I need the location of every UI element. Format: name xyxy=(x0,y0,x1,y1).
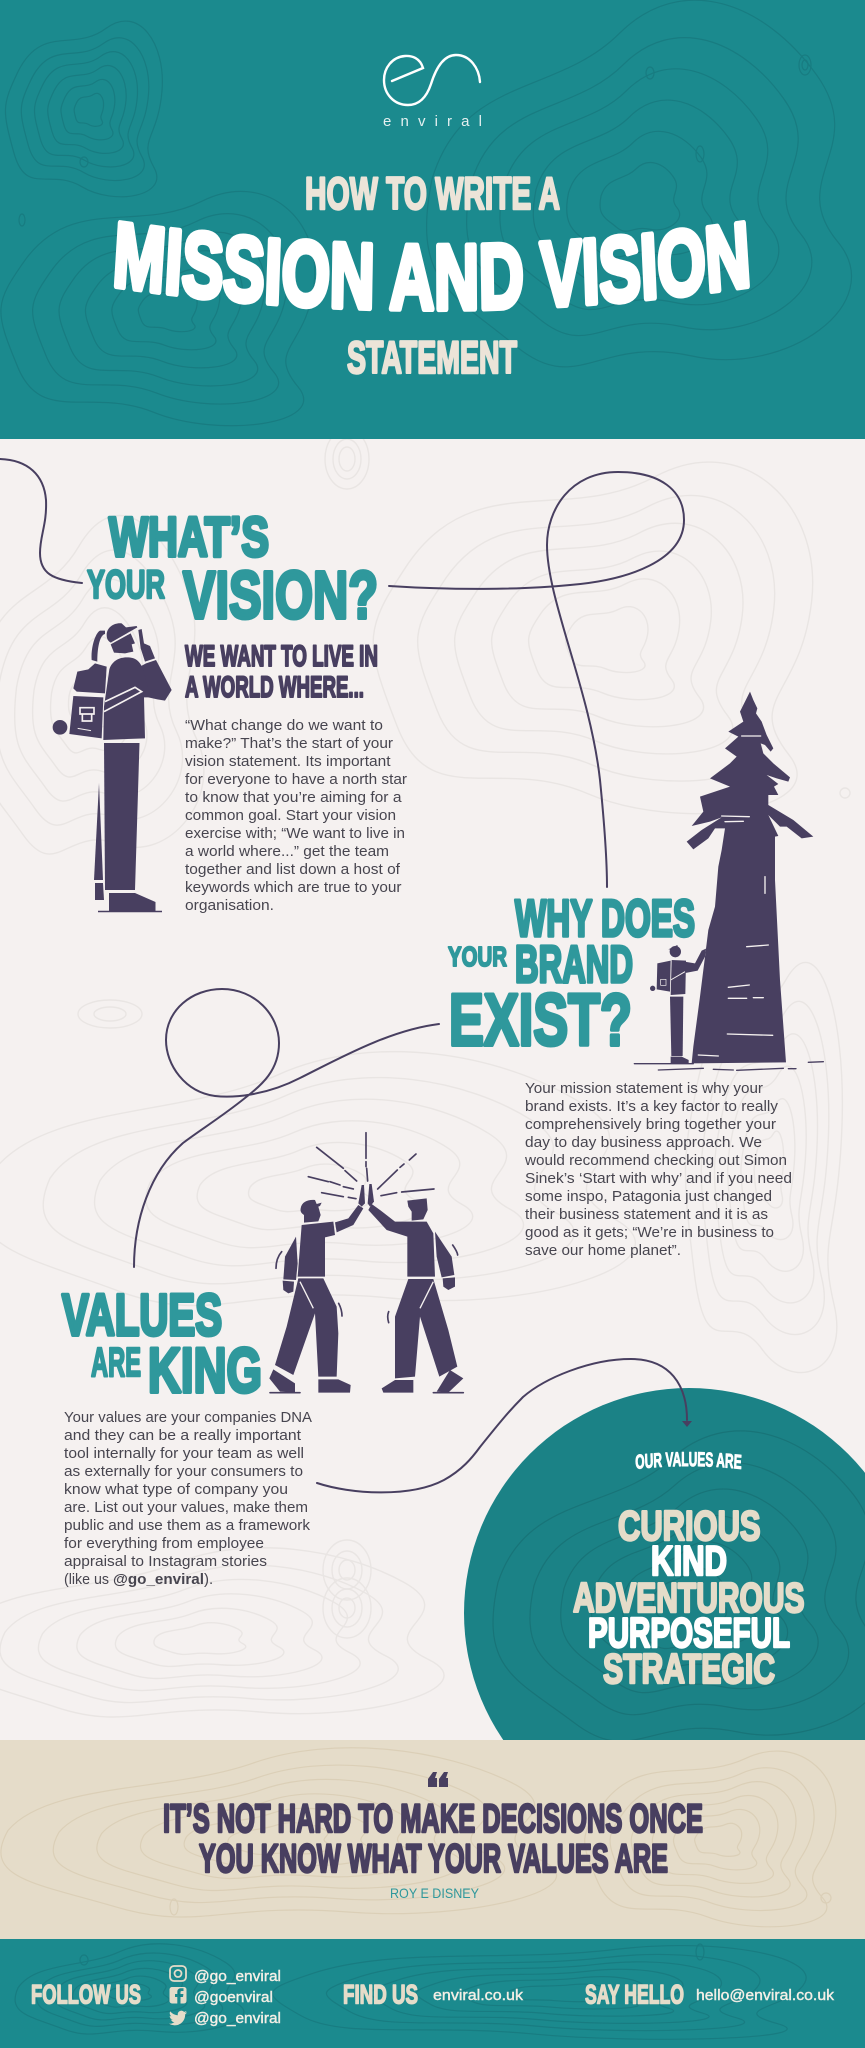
icon: facebook xyxy=(170,1987,186,2004)
heading: what's your vision xyxy=(87,505,378,633)
text block: mission body: comprehensively bring together your xyxy=(525,1116,776,1133)
subheading: we want to live in a world where: WE WANT TO LIVE IN xyxy=(185,640,378,673)
icon: instagram xyxy=(170,1966,186,1981)
footer: say hello xyxy=(585,1980,835,2010)
tree marks xyxy=(698,736,773,1056)
illustration: two people high-fiving xyxy=(269,1133,463,1393)
small hiker xyxy=(650,945,706,1063)
text block: mission body: brand exists. It’s a key factor to really xyxy=(525,1098,779,1115)
panel: values circle xyxy=(464,1388,865,1740)
text block: vision body: for everyone to have a north star xyxy=(185,771,407,788)
heading: why does your brand exist: BRAND xyxy=(515,936,633,994)
illustration: hiker with binoculars xyxy=(53,623,172,912)
text block: values body: as externally for your consumers to xyxy=(64,1463,303,1480)
value: kind: KIND xyxy=(651,1537,727,1584)
text block: mission body: save our home planet”. xyxy=(525,1242,681,1259)
footer: say hello: hello@enviral.co.uk xyxy=(696,1987,835,2004)
text block: values body: (like us xyxy=(64,1571,109,1588)
text block: vision body: keywords which are true to your xyxy=(185,879,402,896)
heading: what's your vision: YOUR xyxy=(87,563,165,607)
icon: quotation mark xyxy=(428,1772,448,1787)
title line 1: HOW TO WRITE A xyxy=(305,168,560,219)
impact lines xyxy=(270,1133,463,1393)
text block: mission body: their business statement and it is as xyxy=(525,1206,768,1223)
brand name: enviral xyxy=(383,113,482,130)
handle: instagram: @go_enviral xyxy=(194,1968,281,1985)
text block: values body: for everything from employee xyxy=(64,1535,264,1552)
text block: mission body: Sinek’s ‘Start with why’ and if you need xyxy=(525,1170,792,1187)
heading: why does your brand exist: EXIST? xyxy=(449,980,632,1061)
panel: header background xyxy=(0,0,865,439)
arrow: loop from brand to values heading xyxy=(134,989,439,1267)
arrow: curve into vision heading xyxy=(0,459,82,583)
panel: main background xyxy=(0,429,865,1740)
heading: values are king: KING xyxy=(148,1336,262,1406)
text block: values body: Your values are your companies DNA xyxy=(64,1409,312,1426)
panel: quote band xyxy=(0,1740,865,1939)
text block: values body: public and use them as a framework xyxy=(64,1517,311,1534)
heading: values are king: VALUES xyxy=(62,1283,222,1348)
right person xyxy=(368,1184,463,1393)
upper body xyxy=(53,623,172,740)
title line 3: STATEMENT xyxy=(347,332,517,383)
title xyxy=(114,168,750,383)
tree xyxy=(634,692,823,1070)
value: strategic: STRATEGIC xyxy=(603,1645,775,1692)
arrow: loop from vision to brand heading xyxy=(389,472,684,887)
text block: vision body: make?” That’s the start of your xyxy=(185,735,393,752)
quote attribution: ROY E DISNEY xyxy=(390,1885,480,1901)
left person xyxy=(269,1185,365,1393)
legs and boots xyxy=(104,743,140,890)
footer: follow us xyxy=(31,1966,281,2027)
text block: vision body: “What change do we want to xyxy=(185,717,383,734)
text block: mission body: good as it gets; “We’re in business to xyxy=(525,1224,774,1241)
values heading: OUR VALUES ARE xyxy=(635,1452,742,1470)
subheading: we want to live in a world where: A WORLD WHERE... xyxy=(185,671,364,704)
text block: vision body: exercise with; “We want to live in xyxy=(185,825,405,842)
footer: say hello: SAY HELLO xyxy=(585,1980,684,2010)
logo xyxy=(383,55,482,130)
heading: why does your brand exist: WHY DOES xyxy=(515,890,695,948)
text block: vision body xyxy=(185,717,407,914)
footer: find us xyxy=(343,1980,524,2010)
text block: values body: are. List out your values, make them xyxy=(64,1499,308,1516)
values list xyxy=(572,1452,804,1692)
handle: twitter: @go_enviral xyxy=(194,2010,281,2027)
footer: find us: FIND US xyxy=(343,1980,418,2010)
text block: values body: appraisal to Instagram stories xyxy=(64,1553,267,1570)
footer: find us: enviral.co.uk xyxy=(433,1987,524,2004)
heading: why does your brand exist: YOUR xyxy=(448,941,507,972)
title line 2: MISSION AND VISION xyxy=(114,220,750,312)
text block: mission body: day to day business approach. We xyxy=(525,1134,762,1151)
text block: vision body: to know that you’re aiming for a xyxy=(185,789,402,806)
icon: twitter xyxy=(169,2011,187,2025)
heading: values are king xyxy=(62,1283,262,1406)
text block: mission body: some inspo, Patagonia just changed xyxy=(525,1188,772,1205)
text block: values body: ). xyxy=(204,1571,213,1588)
heading: what's your vision: VISION? xyxy=(183,558,378,633)
quote xyxy=(163,1797,703,1881)
heading: what's your vision: WHAT’S xyxy=(109,505,269,568)
text block: mission body: would recommend checking out Simon xyxy=(524,1152,787,1169)
label: FOLLOW US xyxy=(31,1980,141,2010)
heading: why does your brand exist xyxy=(448,890,695,1061)
text block: mission body: Your mission statement is why your xyxy=(525,1080,763,1097)
text block: vision body: vision statement. Its important xyxy=(185,753,391,770)
text block: vision body: organisation. xyxy=(185,897,274,914)
value: curious: CURIOUS xyxy=(618,1502,760,1549)
illustration: tree with hiker xyxy=(634,692,823,1070)
text block: values body: know what type of company you xyxy=(64,1481,288,1498)
panel: footer xyxy=(0,1939,865,2048)
text block: vision body: common goal. Start your vision xyxy=(185,807,396,824)
text block: values body xyxy=(64,1409,312,1588)
text block: vision body: together and list down a host of xyxy=(185,861,401,878)
icon: en monogram xyxy=(384,55,480,105)
arrow: curve into values circle xyxy=(317,1359,692,1492)
text block: values body: @go_enviral xyxy=(113,1571,204,1588)
heading: values are king: ARE xyxy=(91,1339,141,1385)
handle: facebook: @goenviral xyxy=(194,1989,273,2006)
subheading: we want to live in a world where xyxy=(185,640,378,704)
text block: vision body: a world where...” get the team xyxy=(185,843,389,860)
text block: mission body xyxy=(524,1080,792,1259)
text block: values body: and they can be a really important xyxy=(64,1427,302,1444)
text block: values body: tool internally for your team as well xyxy=(64,1445,304,1462)
